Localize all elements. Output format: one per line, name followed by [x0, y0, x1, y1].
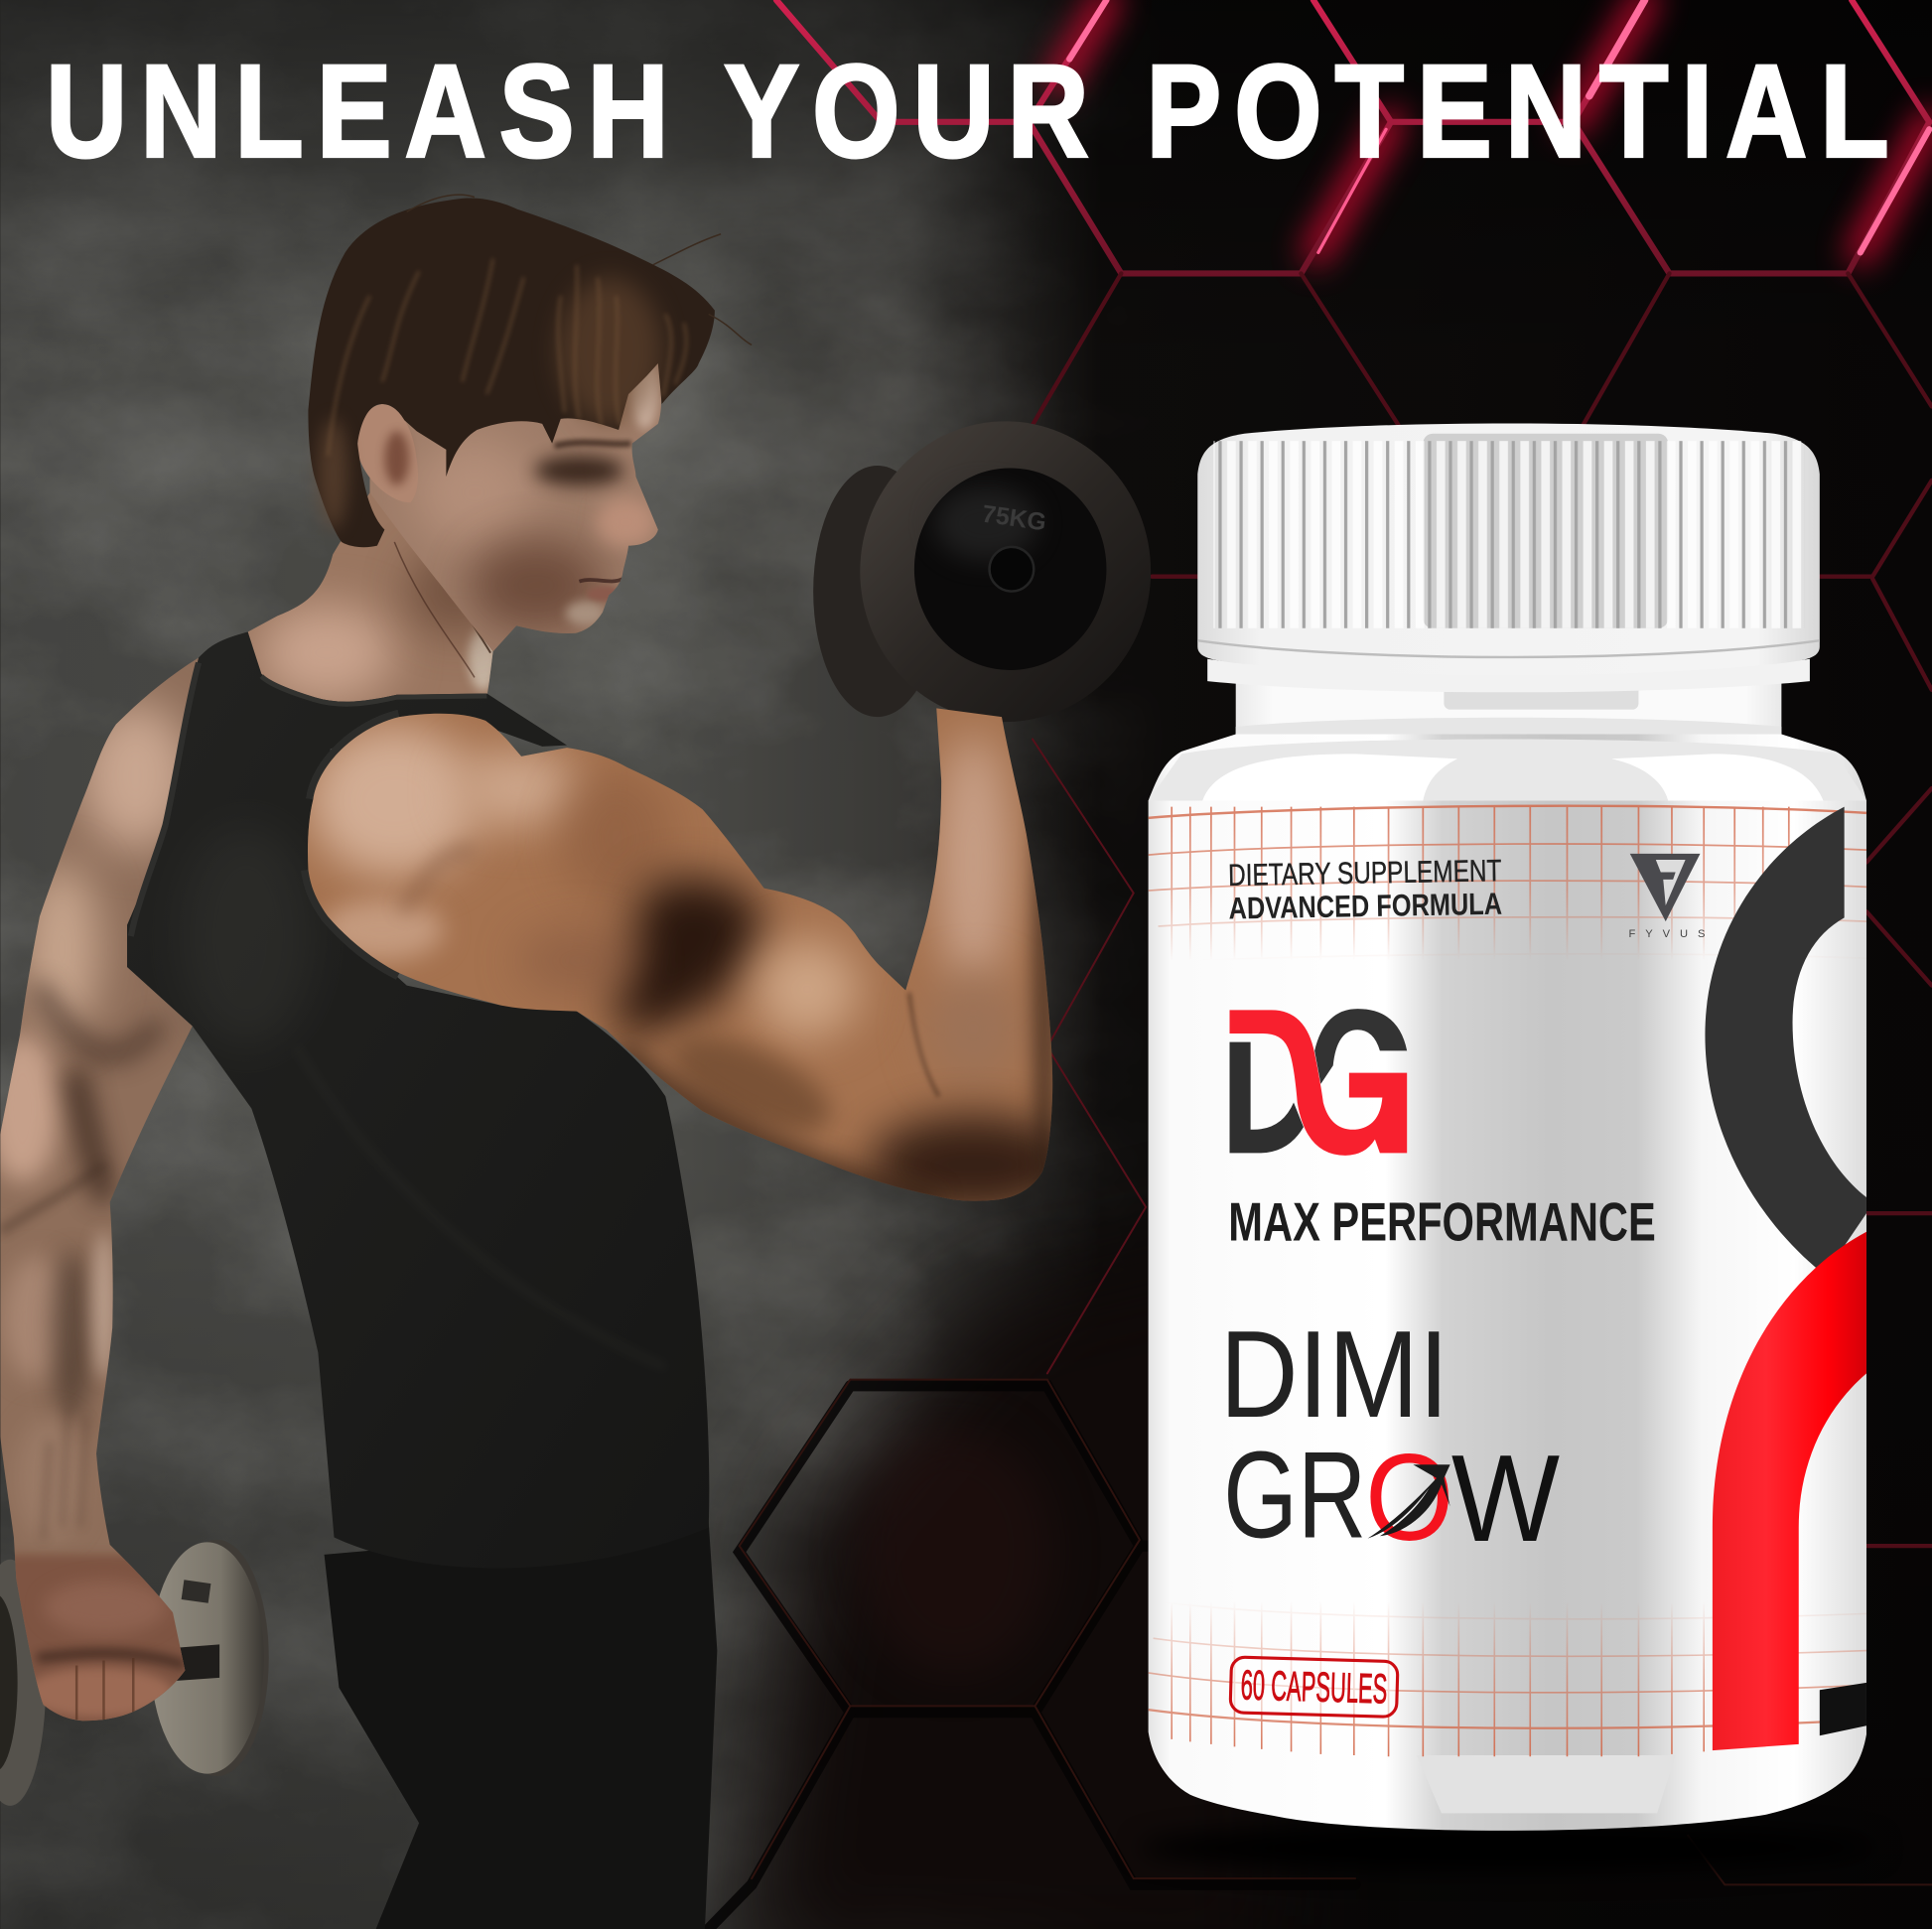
- muscular flexed arm: [296, 702, 1078, 1219]
- rear arm holding lower dumbbell: [0, 646, 209, 1739]
- FYVUS logo: FYVUS: [1629, 928, 1705, 940]
- shorts: [325, 1521, 717, 1929]
- product bottle: [1140, 424, 1878, 1872]
- GROW product name: GR: [1223, 1427, 1366, 1564]
- lower dumbbell: [0, 1540, 269, 1806]
- athlete figure: [0, 195, 1151, 1929]
- neck and upper back skin: [248, 492, 492, 702]
- white cap with ribs: [1197, 424, 1820, 692]
- large black arc graphic: [1705, 807, 1866, 1275]
- FYVUS logo: [1629, 854, 1705, 940]
- black block graphic: [1820, 1683, 1866, 1735]
- supplement text: DIETARY SUPPLEMENT: [1228, 853, 1502, 893]
- bottle neck: [1236, 659, 1781, 746]
- graph-paper grid at bottom of label: [1149, 1601, 1866, 1756]
- graph-paper grid at top of label: [1149, 806, 1866, 963]
- dumbbell weight mark: 75KG: [980, 501, 1047, 536]
- bottle contact shadow: [1140, 1823, 1878, 1872]
- hexagon wall with red neon lines: [709, 0, 1932, 1929]
- title: UNLEASH YOUR POTENTIAL: [46, 38, 1889, 186]
- head: face, ear: [357, 354, 665, 653]
- bottle body: [1149, 734, 1866, 1831]
- supplement text: [1228, 853, 1502, 926]
- black tank top: [127, 631, 709, 1569]
- GROW product name: O: [1365, 1430, 1453, 1567]
- supplement text: ADVANCED FORMULA: [1228, 887, 1502, 926]
- 60 capsules badge: 60 CAPSULES: [1240, 1661, 1388, 1713]
- 60 capsules badge: [1230, 1657, 1398, 1717]
- DIMI: DIMI: [1220, 1307, 1449, 1444]
- DG monogram: [1230, 1009, 1407, 1156]
- GROW product name: W: [1451, 1431, 1560, 1568]
- MAX PERFORMANCE: MAX PERFORMANCE: [1228, 1191, 1656, 1252]
- background: smoke and dark gradient: [0, 0, 1132, 1929]
- upper dumbbell: [813, 421, 1151, 722]
- large red arc graphic: [1713, 1232, 1866, 1750]
- hair: [308, 195, 752, 547]
- GROW product name: [1223, 1427, 1560, 1568]
